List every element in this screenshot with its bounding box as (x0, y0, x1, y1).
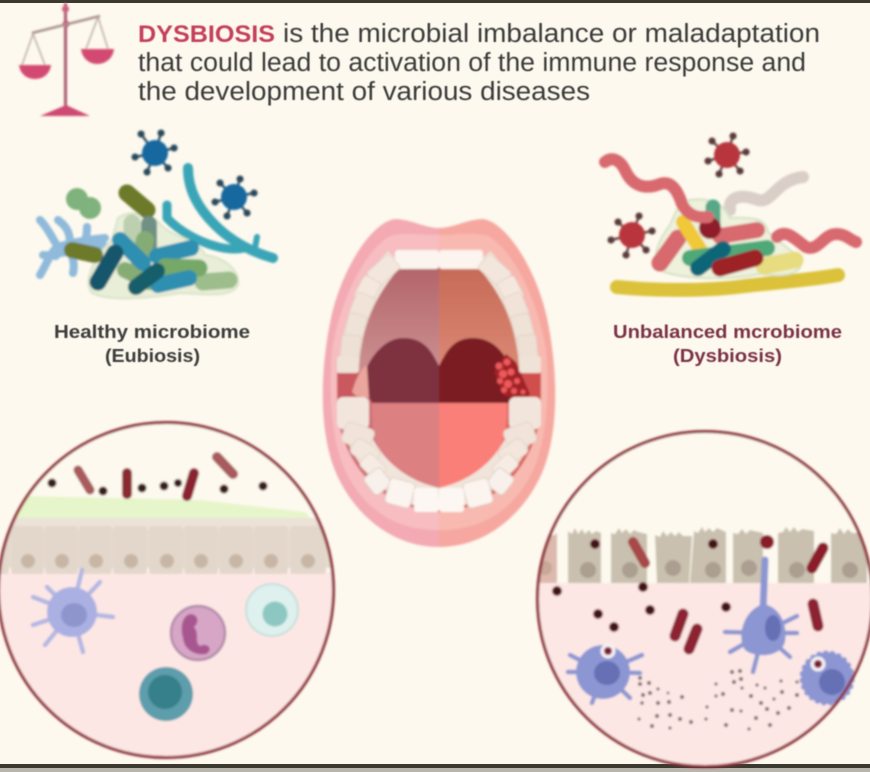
rod cluster halo (656, 199, 801, 278)
icon: virus 2 (215, 179, 254, 216)
damaged epithelial cells (538, 527, 867, 583)
dendritic cell (33, 570, 113, 652)
circle outline (538, 432, 870, 766)
throat and palate (337, 252, 541, 512)
panel: healthy tissue magnified circle (0, 422, 340, 762)
microbes above mucus (48, 457, 268, 496)
epithelial cells (0, 518, 340, 574)
label: unbalanced microbiome: Unbalanced mcrobiome (613, 321, 842, 342)
mucosa tissue (0, 572, 340, 762)
illustration: healthy microbiome (40, 133, 273, 298)
circle outline (0, 422, 334, 758)
rod cluster halo (89, 213, 238, 298)
label: healthy microbiome: Healthy microbiome (54, 321, 250, 342)
illustration: open mouth (323, 219, 555, 547)
lymphocyte teal (139, 667, 193, 721)
activated dendritic cell 2 (725, 560, 797, 672)
top border (0, 0, 870, 3)
heading: definition of dysbiosis: DYSBIOSIS (138, 21, 275, 48)
macrophage (801, 652, 853, 704)
invading microbes (552, 535, 823, 649)
pink spirochete right (777, 234, 856, 248)
green cocci (66, 188, 101, 219)
label: unbalanced microbiome (613, 321, 842, 366)
label: unbalanced microbiome: (Dysbiosis) (673, 345, 782, 366)
label: healthy microbiome (54, 321, 250, 366)
teeth (337, 250, 541, 512)
heading: definition of dysbiosis (138, 20, 820, 106)
rod cluster (72, 193, 229, 287)
icon: red virus 1 (708, 136, 746, 174)
activated dendritic cell 1 (568, 644, 642, 703)
panel: dysbiotic tissue magnified circle (535, 431, 870, 772)
dashed centre line (437, 200, 440, 592)
icon: red virus 2 (611, 216, 652, 255)
icon: virus 1 (135, 133, 174, 172)
rod cluster (660, 207, 795, 268)
light blue dendritic bacteria (40, 220, 105, 275)
heading: definition of dysbiosis: is the microbial imbalance or maladaptation (283, 20, 820, 48)
green mucus layer (15, 496, 312, 520)
yellow filament (617, 275, 838, 290)
grey spirochete (730, 177, 803, 210)
dark red coccus (699, 217, 721, 239)
heading: definition of dysbiosis: that could lead to activation of the immune response and (138, 49, 806, 77)
lips (323, 219, 555, 547)
cytokine particles (637, 669, 799, 731)
lymphocyte pale (246, 584, 298, 636)
heading: definition of dysbiosis: the development of various diseases (138, 78, 590, 106)
lesions (352, 354, 530, 400)
neutrophil (171, 606, 225, 660)
icon: balance scale (19, 3, 114, 116)
mucosa tissue (535, 583, 870, 772)
bottom border (0, 764, 870, 772)
tonsils (360, 338, 527, 403)
pink spirochete top (605, 159, 708, 217)
teal filamentous bacteria (167, 168, 273, 258)
tongue (372, 403, 507, 487)
illustration: unbalanced microbiome (605, 136, 856, 290)
label: healthy microbiome: (Eubiosis) (105, 345, 200, 366)
